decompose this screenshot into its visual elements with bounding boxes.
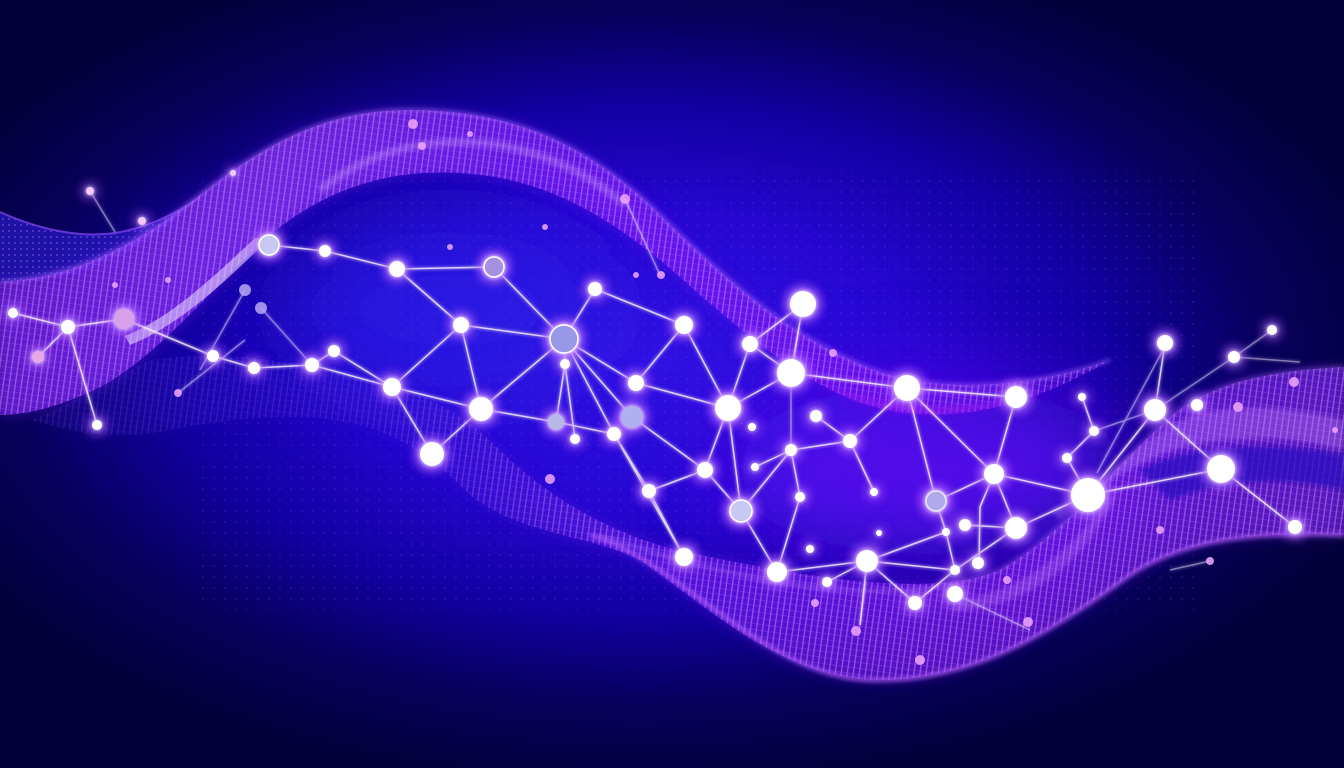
background dot grid xyxy=(200,170,1200,610)
network connection lines xyxy=(13,191,1300,630)
ribbon: left back fold xyxy=(0,197,200,282)
faint pink dust particles xyxy=(112,119,1338,665)
central light bloom xyxy=(290,230,1130,555)
ribbon: lower mesh wave xyxy=(30,356,1344,680)
network nodes xyxy=(8,170,1302,610)
ribbon: upper mesh wave xyxy=(0,110,1110,415)
